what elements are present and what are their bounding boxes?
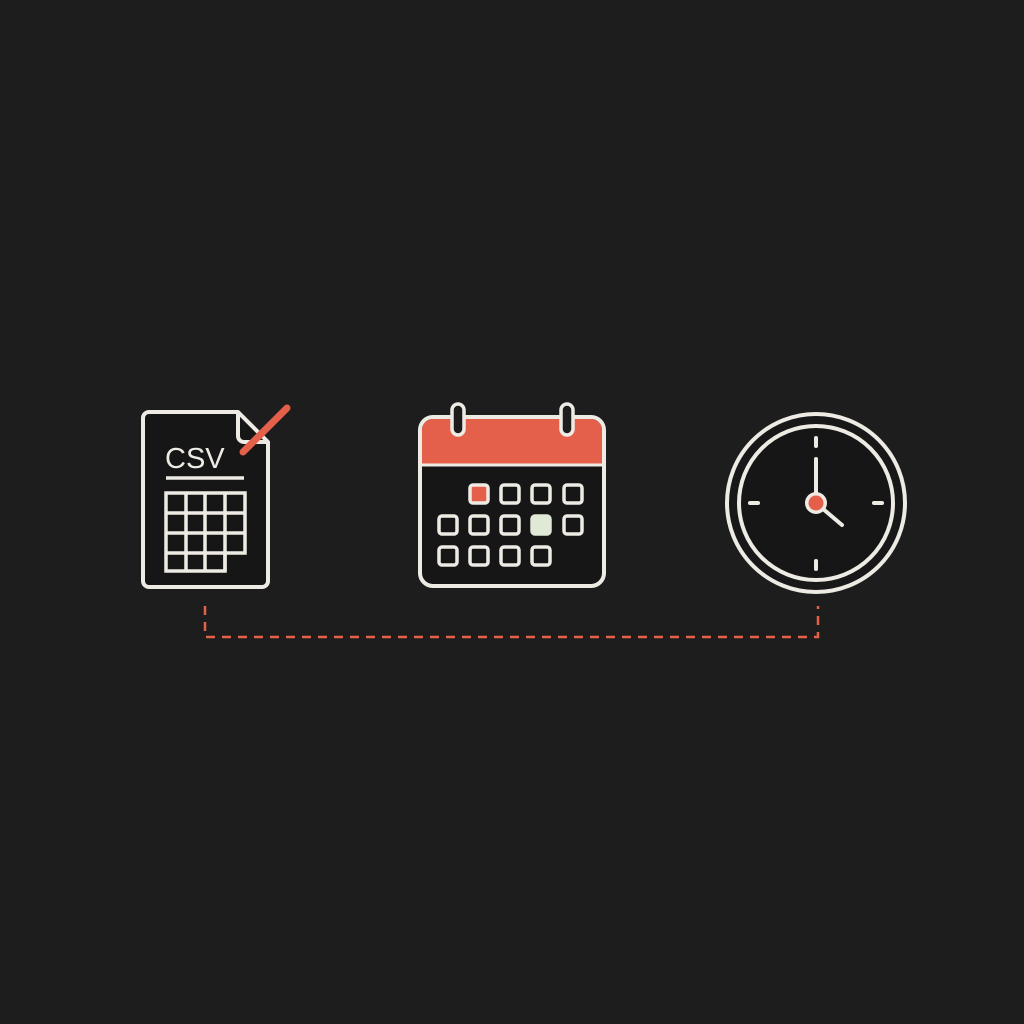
pencil stroke xyxy=(243,408,287,452)
icon: csv document xyxy=(143,408,287,587)
day cells xyxy=(439,485,582,565)
icon: calendar xyxy=(420,404,604,586)
table grid xyxy=(166,493,245,571)
icon: clock xyxy=(727,414,905,592)
label: CSV: CSV xyxy=(165,443,225,475)
dashed connector xyxy=(205,606,818,637)
rings xyxy=(452,404,464,435)
